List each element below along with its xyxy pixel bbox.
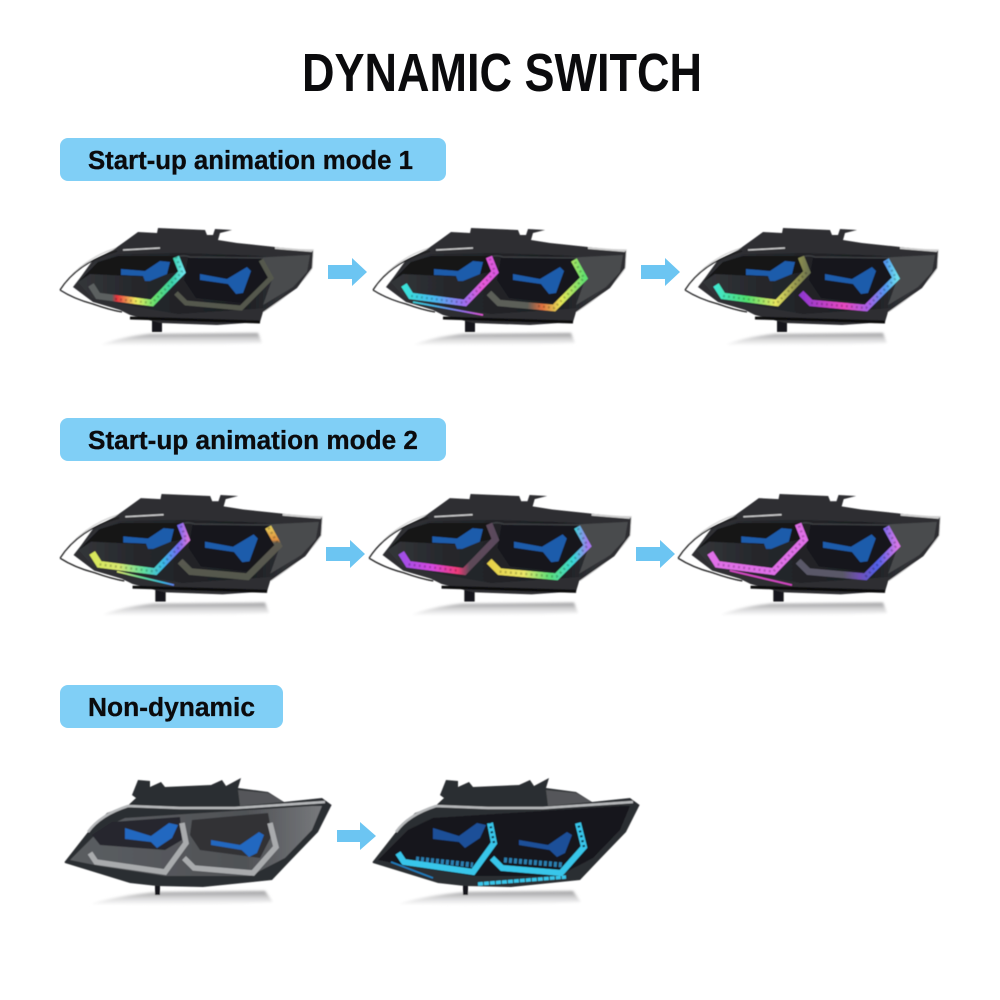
headlamp 1-1 — [60, 228, 313, 346]
arrow 1-2 — [641, 258, 680, 286]
arrow 2-1 — [326, 540, 365, 568]
section label: mode 2 — [60, 418, 446, 461]
headlamp 3-1: off — [64, 778, 332, 905]
arrow 1-1 — [328, 258, 367, 286]
headlamp 2-2 — [369, 494, 631, 616]
headlamp 1-2 — [373, 228, 626, 346]
headlamp 2-1 — [60, 494, 322, 616]
arrow 3 — [337, 822, 376, 850]
section label: non-dynamic: Non-dynamic — [88, 694, 255, 722]
headlamp 3-2: on — [372, 778, 640, 905]
section label: mode 2: Start-up animation mode 2 — [88, 427, 418, 455]
headlamp 1-3 — [685, 228, 938, 346]
headlamp 2-3 — [678, 494, 940, 616]
section label: mode 1: Start-up animation mode 1 — [88, 147, 413, 175]
title: DYNAMIC SWITCH — [302, 43, 702, 103]
arrow 2-2 — [636, 540, 675, 568]
section label: non-dynamic — [60, 685, 283, 728]
section label: mode 1 — [60, 138, 446, 181]
